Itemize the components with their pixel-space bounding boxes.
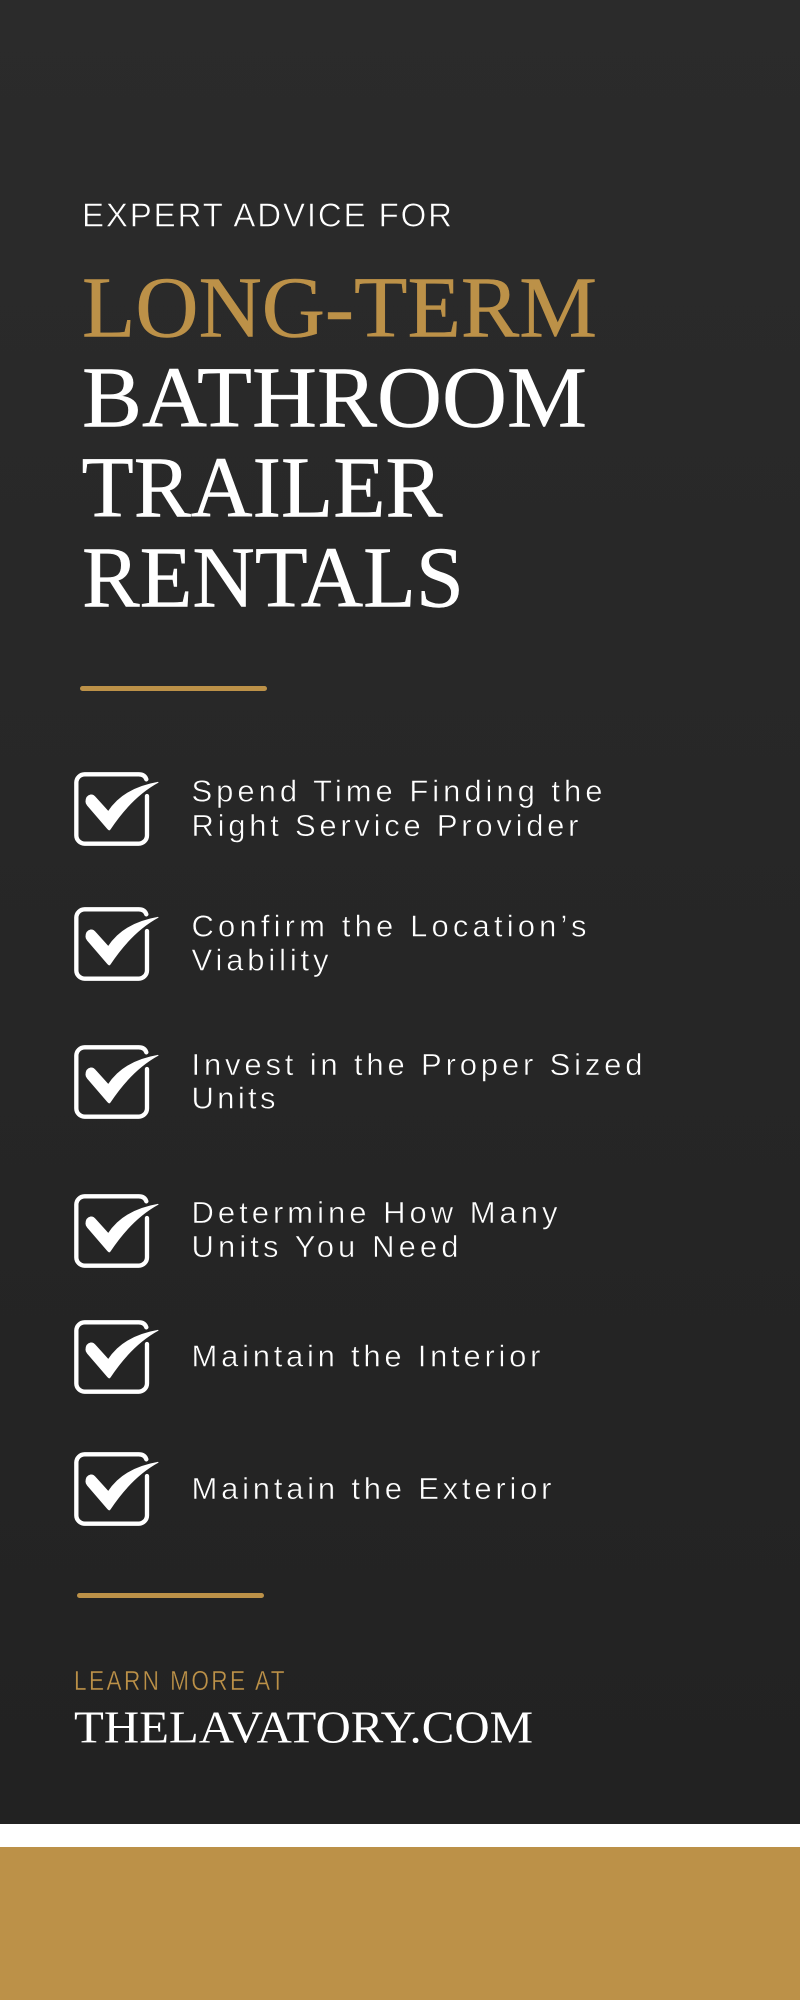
list item: service provider <box>76 774 602 844</box>
item text: Determine How Many <box>192 1195 558 1230</box>
gold divider: bottom <box>77 1593 264 1598</box>
gold divider: top <box>80 686 267 691</box>
item text: Units You Need <box>192 1229 458 1264</box>
item text: Right Service Provider <box>192 808 578 843</box>
website: THELAVATORY.COM <box>74 1702 533 1753</box>
icon: checkbox <box>76 1196 158 1266</box>
icon: checkbox <box>76 909 158 979</box>
title line: rentals: RENTALS <box>82 529 464 626</box>
checklist <box>76 774 642 1524</box>
item text: Viability <box>192 943 329 978</box>
call to action: LEARN MORE AT <box>74 1665 287 1696</box>
item text: Maintain the Interior <box>192 1339 540 1374</box>
title line: trailer: TRAILER <box>82 439 442 536</box>
list item: exterior <box>76 1454 552 1524</box>
title line: long-term: LONG-TERM <box>82 259 597 356</box>
icon: checkbox <box>76 1047 158 1117</box>
item text: Spend Time Finding the <box>192 774 602 809</box>
list item: location viability <box>76 909 587 979</box>
item text: Confirm the Location’s <box>192 909 586 944</box>
title <box>82 259 597 626</box>
list item: how many units <box>76 1195 558 1266</box>
panel: white band <box>0 1824 800 1847</box>
icon: checkbox <box>76 1454 158 1524</box>
icon: checkbox <box>76 774 158 844</box>
item text: Units <box>192 1080 276 1116</box>
item text: Invest in the Proper Sized <box>192 1047 642 1082</box>
panel: gold footer band <box>0 1847 800 2000</box>
list item: proper sized units <box>76 1047 642 1117</box>
icon: checkbox <box>76 1322 158 1392</box>
title line: bathroom: BATHROOM <box>82 349 587 446</box>
item text: Maintain the Exterior <box>192 1471 552 1506</box>
heading: eyebrow: EXPERT ADVICE FOR <box>82 196 452 234</box>
list item: interior <box>76 1322 541 1392</box>
